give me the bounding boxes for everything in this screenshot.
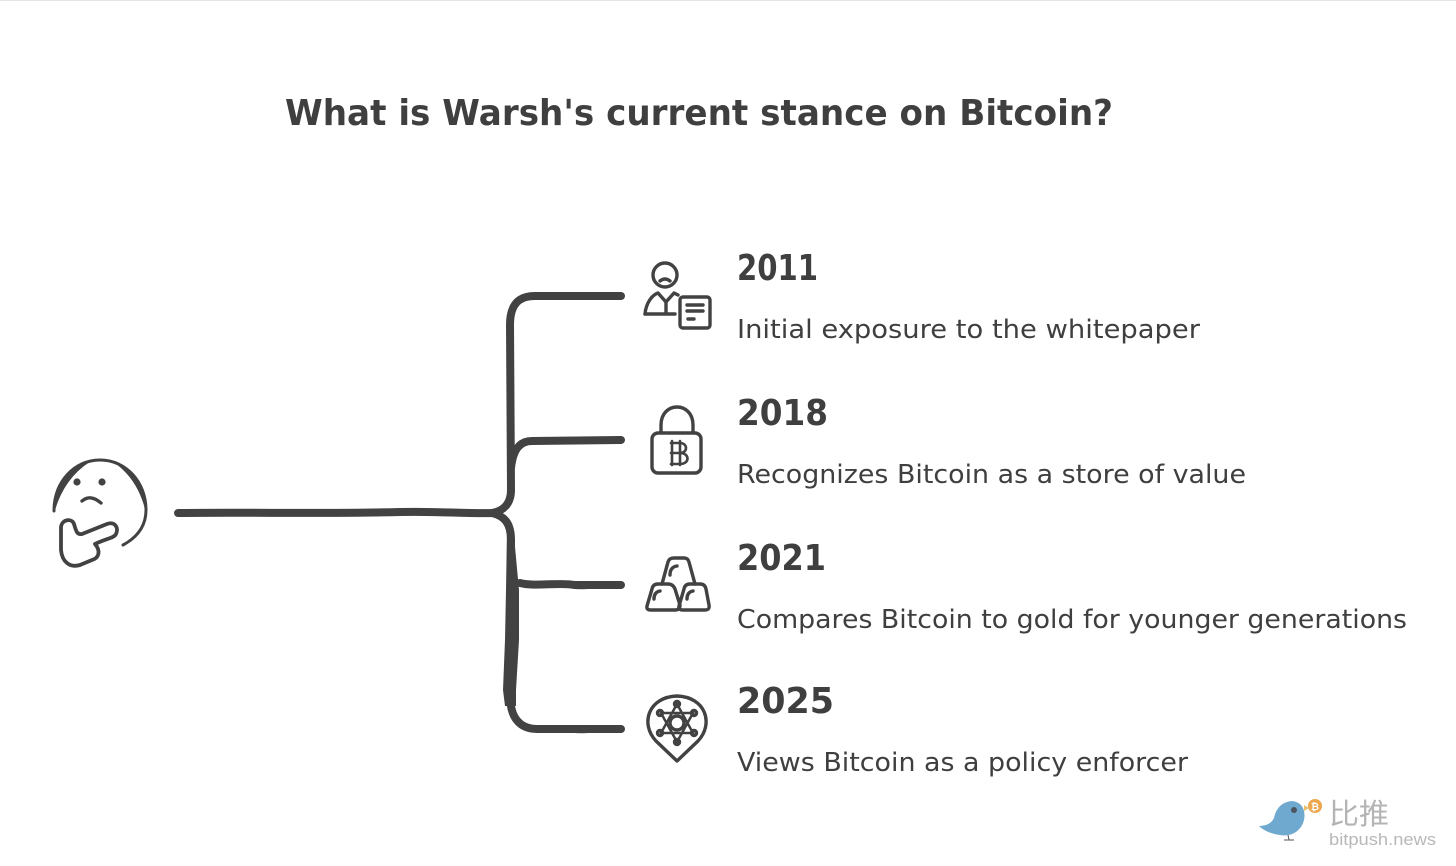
timeline entry 2018: 2018 (737, 393, 828, 434)
icon: gold bars (647, 558, 709, 610)
timeline entry 2025: 2025 (737, 681, 834, 722)
icon: sheriff badge pin (648, 696, 706, 761)
timeline entry 2011 (737, 248, 1200, 345)
watermark: bitpush logo (1259, 791, 1436, 849)
timeline entry 2021: Compares Bitcoin to gold for younger generations (737, 605, 1407, 635)
watermark: bitpush logo: bitpush.news (1329, 830, 1436, 849)
timeline entry 2025: Views Bitcoin as a policy enforcer (737, 748, 1188, 778)
timeline entry 2011: 2011 (737, 248, 818, 289)
tree connector (178, 294, 621, 732)
timeline entry 2025 (737, 681, 1188, 778)
timeline entry 2021 (737, 538, 1407, 635)
icon: thinking face (54, 460, 146, 566)
timeline entry 2018: Recognizes Bitcoin as a store of value (737, 460, 1246, 490)
title: What is Warsh's current stance on Bitcoin? (285, 93, 1113, 134)
icon: person with document (645, 263, 710, 328)
timeline entry 2018 (737, 393, 1246, 490)
watermark: bitpush logo: ₿ (1311, 801, 1319, 813)
icon: bitcoin padlock (652, 407, 701, 473)
timeline entry 2011: Initial exposure to the whitepaper (737, 315, 1200, 345)
watermark: bitpush logo: 比推 (1329, 791, 1389, 833)
timeline entry 2021: 2021 (737, 538, 826, 579)
